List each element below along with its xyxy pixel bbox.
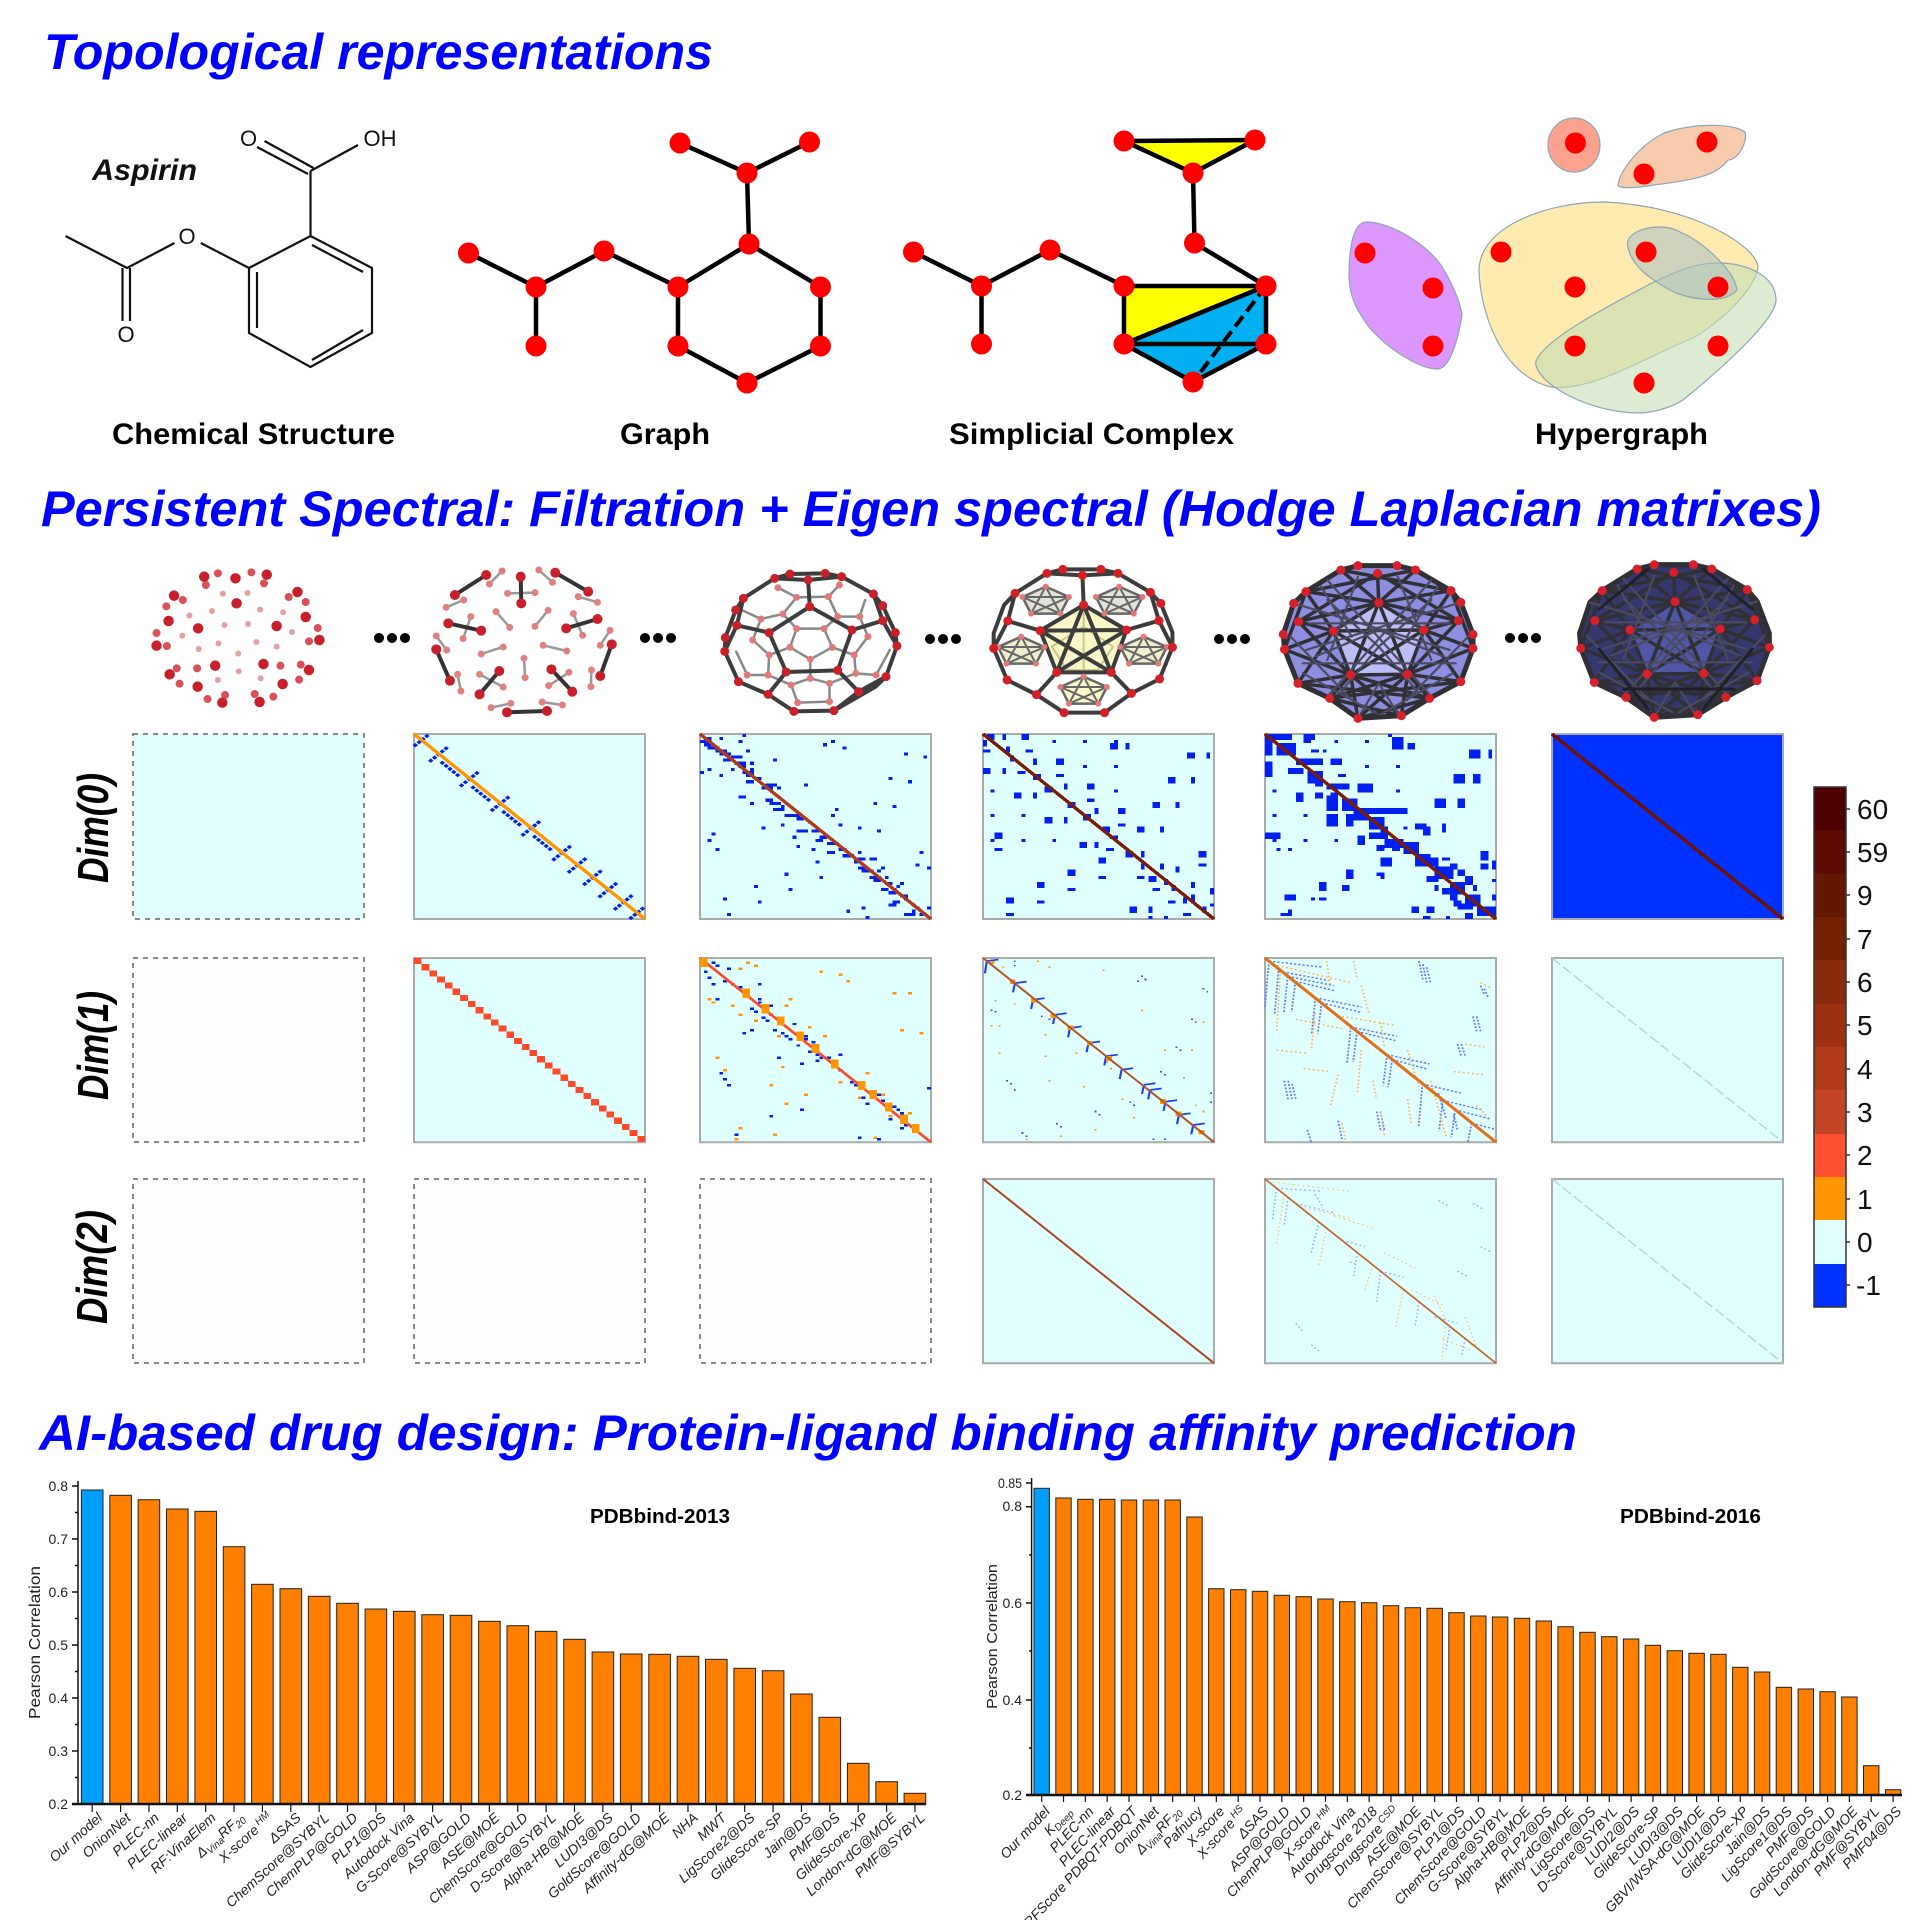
- matrix: Dim0 stage 2: [414, 734, 645, 919]
- x axis method labels: GlideScore-XP: [792, 1809, 872, 1883]
- y axis title: Pearson Correlation: [27, 1566, 44, 1719]
- x axis method labels: Deep: [1053, 1808, 1077, 1834]
- y axis tick labels: 0.6: [49, 1584, 68, 1600]
- x axis method labels: ASE@MOE: [1361, 1803, 1424, 1869]
- y axis tick labels: [998, 1475, 1022, 1803]
- x axis method labels: CSD: [1374, 1803, 1399, 1828]
- x axis method labels: Alpha-HB@MOE: [1448, 1803, 1534, 1892]
- x axis method labels: RF: [1152, 1810, 1177, 1836]
- colour bar labels: 3: [1857, 1097, 1873, 1128]
- x axis method labels: LUDI1@DS: [1668, 1803, 1730, 1868]
- colour bar labels: 2: [1857, 1140, 1873, 1171]
- colour bar labels: 1: [1857, 1184, 1873, 1215]
- x axis method labels: GlideScore-SP: [1589, 1803, 1665, 1882]
- x axis method labels: GoldScore@GOLD: [544, 1809, 644, 1902]
- x axis method labels: Δ: [1132, 1839, 1150, 1857]
- y axis tick labels: 0.85: [998, 1475, 1022, 1491]
- colour bar labels: 60: [1857, 794, 1888, 825]
- x axis method labels: ChemScore@GOLD: [1391, 1803, 1489, 1908]
- matrix: Dim2 stage 3 (empty): [700, 1179, 931, 1363]
- colour bar labels: 6: [1857, 967, 1873, 998]
- hyperedge blobs: [1349, 118, 1776, 413]
- x axis method labels: Jain@DS: [759, 1809, 815, 1862]
- colour bar frame and ticks: [1814, 787, 1850, 1307]
- chart title: PDBbind-2013: PDBbind-2013: [590, 1506, 730, 1528]
- x axis method labels: NHA: [668, 1809, 701, 1841]
- y axis tick labels: 0.6: [1003, 1595, 1022, 1611]
- x axis method labels: [997, 1802, 1905, 1920]
- x axis method labels: LigScore2@DS: [675, 1809, 758, 1886]
- x axis method labels: PMF@DS: [785, 1809, 843, 1864]
- x axis method labels: MWT: [694, 1808, 730, 1844]
- x axis method labels: GlideScore-SP: [707, 1809, 787, 1883]
- x axis method labels: 20: [1170, 1808, 1186, 1825]
- x axis method labels: [46, 1808, 928, 1910]
- matrix: Dim1 stage 6: [1552, 958, 1783, 1142]
- y axis tick labels: [49, 1478, 68, 1812]
- x axis method labels: RF: [214, 1816, 240, 1841]
- matrix: Dim2 stage 6: [1552, 1179, 1783, 1363]
- x axis method labels: Autodock Vina: [339, 1809, 417, 1882]
- x axis method labels: D-Score@SYBYL: [466, 1809, 559, 1895]
- label: Aspirin: Aspirin: [91, 154, 197, 187]
- colour bar segments: [1814, 787, 1846, 1307]
- matrix: Dim1 stage 3: [700, 958, 931, 1142]
- colour bar labels: 9: [1857, 880, 1873, 911]
- legend: colour bar: [1814, 787, 1888, 1307]
- caption: Graph: Graph: [620, 418, 710, 451]
- x axis method labels: GBVI/WSA-dG@MOE: [1602, 1803, 1708, 1915]
- x axis method labels: Our model: [997, 1802, 1054, 1862]
- x axis method labels: Vina: [205, 1835, 227, 1857]
- y axis tick labels: 0.2: [49, 1796, 68, 1812]
- x axis method labels: GlideScore-XP: [1677, 1803, 1752, 1882]
- x axis method labels: PLEC-nn: [109, 1809, 162, 1859]
- x axis method labels: G-Score@SYBYL: [1424, 1803, 1511, 1896]
- colour bar labels: 59: [1857, 837, 1888, 868]
- bars: [81, 1490, 926, 1804]
- x axis method labels: ChemPLP@GOLD: [1223, 1803, 1315, 1900]
- row label: Dim(2): Dim(2): [68, 1210, 117, 1324]
- matrix: Dim0 stage 6 (full): [1552, 734, 1783, 919]
- x axis method labels: ΔSAS: [1233, 1803, 1272, 1842]
- y axis tick labels: 0.2: [1003, 1787, 1022, 1803]
- x axis method labels: Pafnucy: [1159, 1802, 1206, 1851]
- dots separator 2: [645, 633, 671, 643]
- matrix: Dim0 stage 5: [1265, 734, 1496, 919]
- x axis method labels: Δ: [193, 1843, 210, 1861]
- x axis method labels: LUDI2@DS: [1581, 1803, 1643, 1868]
- fullerene stage 6: fully connected dark complex: [1580, 565, 1769, 717]
- bars: [1034, 1488, 1901, 1795]
- atom labels: O: [178, 224, 196, 249]
- x axis method labels: Jain@DS: [1720, 1803, 1774, 1858]
- panel: filtration fullerene sequence: [156, 565, 1769, 718]
- atom labels: O: [240, 126, 257, 151]
- title: Topological representations: Topological representations: [44, 24, 713, 80]
- atom labels: O: [117, 322, 135, 347]
- x axis method labels: PLP1@DS: [328, 1809, 389, 1867]
- x axis method labels: X-score: [1182, 1803, 1228, 1850]
- fullerene stage 5: blue filled complex: [1283, 566, 1473, 718]
- graph nodes: [458, 132, 831, 394]
- x axis method labels: ChemScore@GOLD: [425, 1809, 531, 1907]
- y axis tick labels: 0.5: [49, 1637, 68, 1653]
- hypergraph nodes: [1354, 132, 1728, 394]
- x axis method labels: PLEC-nn: [1046, 1803, 1097, 1856]
- x axis method labels: LigScore1@DS: [1717, 1803, 1796, 1885]
- axes and tick marks: [1026, 1478, 1902, 1799]
- x axis method labels: HM: [1312, 1803, 1333, 1824]
- title: Persistent Spectral: Persistent Spectral: Filtration + Eigen spectral (Hodge Laplacian matrixes): [41, 481, 1821, 537]
- matrix: Dim1 stage 4: [983, 958, 1214, 1142]
- filled simplices: [1124, 140, 1266, 382]
- row label: Dim(0): Dim(0): [69, 773, 118, 883]
- colour bar labels: 0: [1857, 1227, 1873, 1258]
- matrix: Dim2 stage 4: [983, 1179, 1214, 1363]
- simplicial nodes: [903, 130, 1276, 392]
- x axis method labels: ΔSAS: [265, 1809, 304, 1847]
- x axis method labels: ChemScore@SYBYL: [222, 1809, 332, 1910]
- x axis method labels: PLP2@DS: [1497, 1803, 1555, 1864]
- x axis method labels: PMF@DS: [1762, 1803, 1817, 1860]
- x axis method labels: LUDI3@DS: [1624, 1803, 1686, 1868]
- x axis method labels: PLP1@DS: [1410, 1803, 1468, 1864]
- x axis method labels: 20: [233, 1815, 249, 1832]
- x axis method labels: LUDI3@DS: [551, 1809, 616, 1870]
- fullerene stage 1: isolated atoms: [156, 572, 319, 703]
- x axis method labels: PLEC-linear: [124, 1808, 191, 1872]
- x axis method labels: D-Score@SYBYL: [1533, 1803, 1620, 1895]
- x axis method labels: PLEC-linear: [1055, 1802, 1119, 1869]
- x axis method labels: PMF@SYBYL: [1810, 1803, 1882, 1879]
- panel: chemical structure of aspirin: [66, 126, 396, 451]
- x axis method labels: X-score: [215, 1822, 262, 1866]
- panel: simplicial complex: [903, 130, 1276, 451]
- x axis method labels: ChemPLP@GOLD: [262, 1809, 361, 1900]
- x axis method labels: OnionNet: [1110, 1802, 1163, 1857]
- x axis method labels: PMF@SYBYL: [851, 1809, 928, 1881]
- dots separator 5: [1510, 633, 1536, 643]
- x axis method labels: ASE@MOE: [436, 1809, 503, 1871]
- x axis method labels: Vina: [1144, 1830, 1166, 1852]
- atom labels: [117, 126, 396, 347]
- x axis method labels: K: [1040, 1821, 1058, 1838]
- fullerene stage 4: pentagon simplices: [994, 569, 1172, 713]
- x axis method labels: HS: [1226, 1803, 1246, 1823]
- colour bar labels: 4: [1857, 1054, 1873, 1085]
- matrix: Dim1 stage 1 (empty): [133, 958, 364, 1142]
- caption: Chemical Structure: Chemical Structure: [112, 418, 395, 451]
- x axis method labels: G-Score@SYBYL: [352, 1809, 446, 1896]
- colour bar labels: 7: [1857, 924, 1873, 955]
- x axis method labels: HM: [251, 1809, 273, 1830]
- row label: Dim(1): Dim(1): [69, 991, 118, 1100]
- x axis method labels: Affinity-dG@MOE: [1488, 1803, 1577, 1896]
- dots separator 3: [930, 634, 956, 644]
- x axis method labels: Alpha-HB@MOE: [497, 1809, 588, 1893]
- panel: graph: [458, 132, 831, 451]
- x axis method labels: London-dG@MOE: [1770, 1803, 1861, 1899]
- colour bar labels: [1856, 794, 1888, 1301]
- dots separator 4: [1219, 634, 1245, 644]
- simplicial edges: [914, 140, 1266, 382]
- fullerene stage 3: C60 cage: [725, 573, 897, 711]
- x axis method labels: Drugscore: [1330, 1821, 1386, 1879]
- y axis tick labels: 0.7: [49, 1531, 68, 1547]
- atom labels: OH: [364, 126, 396, 151]
- x axis method labels: Drugscore 2018: [1301, 1803, 1381, 1887]
- x axis method labels: ASP@GOLD: [1225, 1803, 1293, 1875]
- chart: PDBbind-2013 bar chart: [27, 1478, 928, 1910]
- x axis method labels: RF:VinaElem: [147, 1809, 219, 1876]
- x axis method labels: London-dG@MOE: [803, 1809, 900, 1899]
- colour bar labels: -1: [1856, 1270, 1881, 1301]
- title: AI-based drug design: AI-based drug design: Protein-ligand binding affinity prediction: [37, 1405, 1577, 1461]
- x axis method labels: ChemScore@SYBYL: [1343, 1803, 1446, 1912]
- fullerene stage 2: first bonds: [436, 570, 612, 712]
- matrix: Dim2 stage 5: [1265, 1179, 1496, 1363]
- dots separator 1: [379, 633, 405, 643]
- y axis tick labels: 0.3: [49, 1743, 68, 1759]
- axes and tick marks: [72, 1481, 926, 1808]
- matrix: Dim1 stage 2: [414, 958, 645, 1142]
- x axis method labels: Our model: [46, 1809, 106, 1865]
- matrix: Dim1 stage 5: [1265, 958, 1496, 1142]
- matrix: Dim2 stage 2 (empty): [414, 1179, 645, 1363]
- x axis method labels: X-score: [1193, 1815, 1238, 1862]
- matrix: Dim0 stage 4: [983, 734, 1214, 919]
- y axis tick labels: 0.8: [1003, 1498, 1022, 1514]
- y axis tick labels: 0.8: [49, 1478, 68, 1494]
- graph edges: [468, 142, 820, 383]
- x axis method labels: OnionNet: [79, 1809, 134, 1861]
- caption: Simplicial Complex: Simplicial Complex: [949, 418, 1234, 451]
- x axis method labels: PMF04@DS: [1839, 1803, 1905, 1872]
- y axis tick labels: 0.4: [1003, 1692, 1022, 1708]
- x axis method labels: Affinity-dG@MOE: [578, 1809, 673, 1896]
- x axis method labels: X-score: [1280, 1817, 1324, 1863]
- x axis method labels: ASP@GOLD: [402, 1809, 474, 1877]
- panel: hypergraph: [1349, 118, 1776, 451]
- chart: PDBbind-2016 bar chart: [984, 1475, 1905, 1920]
- y axis tick labels: 0.4: [49, 1690, 68, 1706]
- caption: Hypergraph: Hypergraph: [1535, 418, 1708, 451]
- colour bar labels: 5: [1857, 1010, 1873, 1041]
- panel: Hodge Laplacian matrices grid: [133, 734, 1783, 1363]
- chart title: PDBbind-2016: PDBbind-2016: [1620, 1506, 1761, 1528]
- x axis method labels: GoldScore@GOLD: [1745, 1803, 1839, 1902]
- x axis method labels: LigScore@DS: [1526, 1803, 1599, 1879]
- matrix: Dim0 stage 3: [700, 734, 931, 919]
- matrix: Dim0 stage 1 (empty, zero): [133, 734, 364, 919]
- matrix: Dim2 stage 1 (empty): [133, 1179, 364, 1363]
- x axis method labels: Autodock Vina: [1285, 1803, 1359, 1881]
- dashed hidden edge: [1193, 286, 1266, 382]
- y axis title: Pearson Correlation: [984, 1564, 1001, 1709]
- aspirin skeletal formula: [66, 141, 372, 367]
